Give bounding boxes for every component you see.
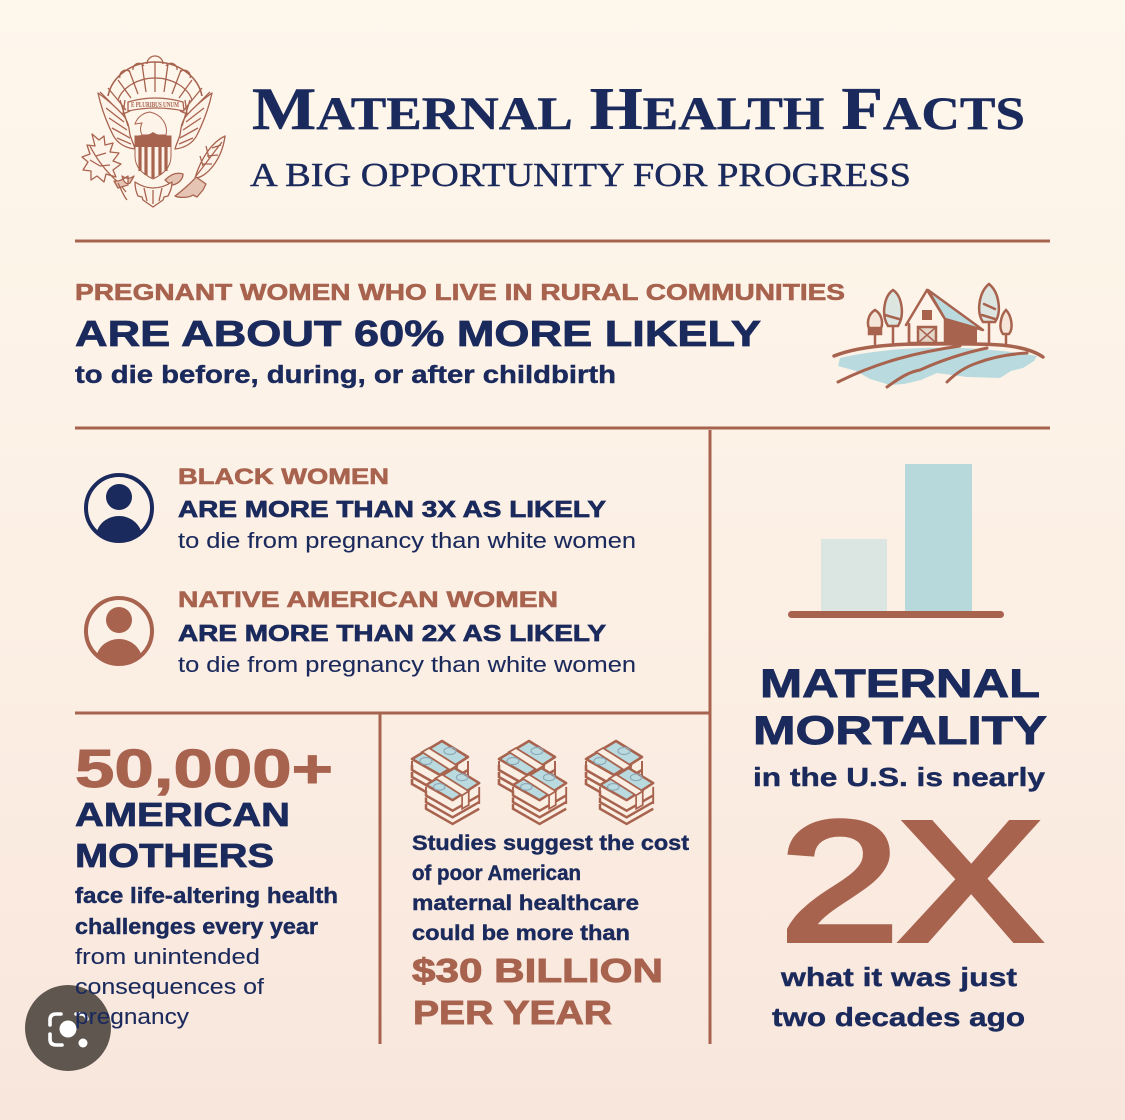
panel: cost of care: of poor American: [412, 862, 581, 885]
panel: cost of care: could be more than: [412, 922, 630, 945]
icon: navy person: [86, 475, 152, 541]
native american women statistic: ARE MORE THAN 2X AS LIKELY: [178, 620, 606, 646]
icon: money stacks: [412, 741, 653, 824]
panel: mothers statistic: pregnancy: [75, 1004, 189, 1029]
subtitle: A BIG OPPORTUNITY FOR PROGRESS: [250, 157, 911, 194]
panel: mothers statistic: challenges every year: [75, 914, 318, 939]
panel: cost of care: maternal healthcare: [412, 892, 639, 915]
2X number: 2X: [780, 787, 1042, 977]
mothers regular text: from unintended: [75, 944, 260, 969]
mothers bold text: face life-altering health: [75, 883, 338, 908]
mortality closing text: what it was just: [780, 962, 1017, 992]
black women heading: BLACK WOMEN: [178, 464, 389, 489]
rural statistic: ARE ABOUT 60% MORE LIKELY: [75, 313, 761, 354]
native american women description: to die from pregnancy than white women: [178, 652, 636, 677]
rural heading: PREGNANT WOMEN WHO LIVE IN RURAL COMMUNITIES: [75, 279, 845, 305]
native american women heading: NATIVE AMERICAN WOMEN: [178, 587, 558, 612]
panel: mothers statistic: MOTHERS: [75, 837, 274, 874]
black women description: to die from pregnancy than white women: [178, 528, 636, 553]
panel: cost of care: [412, 741, 689, 1031]
panel: native american women: [86, 587, 636, 677]
icon: presidential seal: [82, 56, 225, 207]
50,000+ number: 50,000+: [75, 739, 333, 799]
panel: maternal mortality: [753, 464, 1047, 1032]
title: MATERNAL HEALTH FACTS: [252, 76, 1025, 142]
icon: farm: [834, 284, 1043, 387]
panel: black women: [86, 464, 636, 553]
icon: image search badge: [25, 985, 111, 1071]
icon: rust person: [86, 598, 152, 664]
panel: mothers statistic: consequences of: [75, 974, 265, 999]
cost figure: $30 BILLION: [412, 952, 663, 989]
rural description: to die before, during, or after childbirth: [75, 361, 616, 389]
panel: rural communities: [75, 279, 845, 389]
cost text: Studies suggest the cost: [412, 832, 689, 855]
text: E PLURIBUS UNUM: [131, 101, 179, 109]
panel: mothers statistic: [75, 739, 338, 1029]
mortality heading: MATERNAL: [760, 662, 1040, 706]
mortality subtext: in the U.S. is nearly: [753, 762, 1046, 792]
panel: cost of care: PER YEAR: [413, 994, 612, 1031]
panel: maternal mortality: two decades ago: [772, 1002, 1025, 1032]
black women statistic: ARE MORE THAN 3X AS LIKELY: [178, 496, 606, 522]
panel: maternal mortality: MORTALITY: [753, 709, 1047, 753]
american mothers heading: AMERICAN: [75, 796, 290, 833]
divider lines: [75, 241, 1050, 1044]
bar chart: [788, 464, 1004, 618]
seal eagle head: [135, 112, 166, 135]
seal shield: [135, 136, 171, 179]
